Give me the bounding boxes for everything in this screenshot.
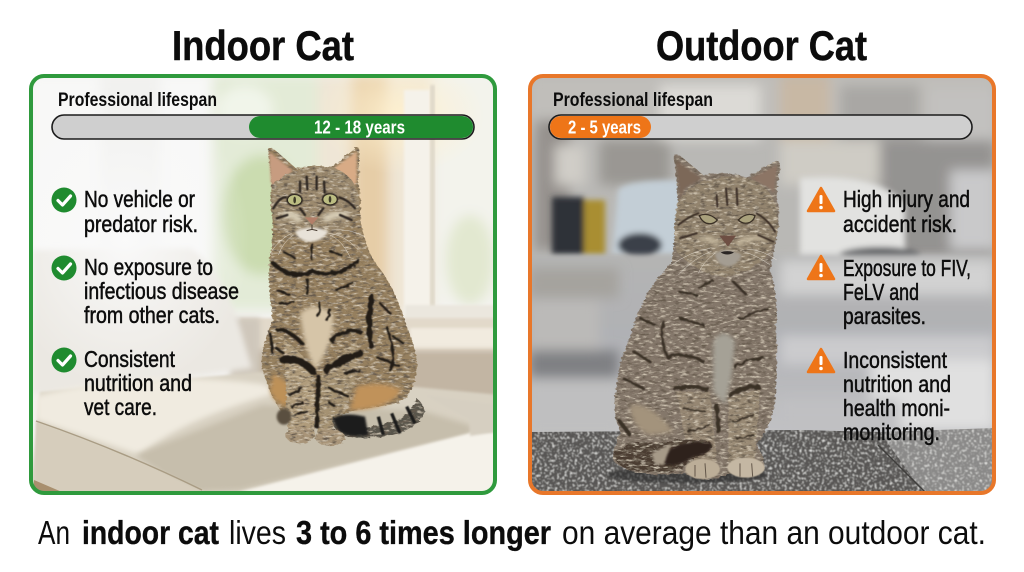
risk: injury and accident: accident risk. — [843, 211, 957, 237]
title: Indoor Cat: Indoor Cat — [172, 22, 354, 69]
lifespan bar: 12 - 18 years: 12 - 18 years — [314, 118, 405, 138]
benefit: consistent nutrition and vet care: vet care. — [84, 394, 157, 420]
lifespan label: Professional lifespan — [58, 90, 217, 111]
panel: indoor cat — [29, 74, 497, 495]
benefit: no infectious disease exposure: No exposure to — [84, 254, 213, 280]
summary sentence — [38, 514, 986, 551]
risk: inconsistent nutrition and monitoring: nutrition and — [843, 371, 951, 397]
lifespan label: Professional lifespan — [553, 90, 713, 111]
lifespan bar: 2 - 5 years — [549, 115, 972, 139]
summary sentence: indoor cat — [82, 514, 219, 551]
benefit: consistent nutrition and vet care: Consistent — [84, 346, 175, 372]
benefit: no vehicle or predator risk: No vehicle or — [84, 186, 195, 212]
summary sentence: on average than an outdoor cat. — [562, 514, 986, 551]
whiskers — [270, 230, 365, 257]
panel: outdoor cat — [529, 75, 995, 495]
risk: FIV, FeLV and parasites: Exposure to FIV, — [843, 255, 971, 281]
summary sentence: lives — [229, 514, 286, 551]
benefit: no infectious disease exposure: from other cats. — [84, 302, 220, 328]
risk: injury and accident — [808, 186, 970, 237]
benefit: consistent nutrition and vet care: nutrition and — [84, 370, 192, 396]
risk: injury and accident: High injury and — [843, 186, 970, 212]
risk: inconsistent nutrition and monitoring: health moni- — [843, 395, 950, 421]
indoor background: sunny window room — [33, 78, 493, 491]
summary sentence: An — [38, 514, 70, 551]
benefit: no infectious disease exposure — [52, 254, 239, 328]
whiskers — [672, 248, 777, 275]
benefit: no vehicle or predator risk: predator risk. — [84, 211, 198, 237]
title: Outdoor Cat: Outdoor Cat — [656, 22, 867, 69]
cat head — [675, 177, 778, 277]
lifespan bar: 12 - 18 years — [52, 115, 474, 139]
lifespan bar: 2 - 5 years: 2 - 5 years — [568, 118, 641, 138]
outdoor background: blurred street — [529, 75, 995, 495]
icon: outdoor tabby cat — [607, 155, 780, 483]
icon: indoor tabby cat — [262, 147, 425, 446]
risk: inconsistent nutrition and monitoring: Inconsistent — [843, 347, 947, 373]
risk: FIV, FeLV and parasites: FeLV and — [843, 279, 919, 305]
summary sentence: 3 to 6 times longer — [296, 514, 551, 551]
benefit: no infectious disease exposure: infectious disease — [84, 278, 239, 304]
benefit: no vehicle or predator risk — [52, 186, 198, 237]
cat head — [272, 167, 359, 242]
benefit: consistent nutrition and vet care — [52, 346, 192, 420]
risk: FIV, FeLV and parasites — [808, 255, 971, 329]
risk: inconsistent nutrition and monitoring — [808, 347, 951, 445]
risk: inconsistent nutrition and monitoring: monitoring. — [843, 419, 940, 445]
risk: FIV, FeLV and parasites: parasites. — [843, 303, 926, 329]
